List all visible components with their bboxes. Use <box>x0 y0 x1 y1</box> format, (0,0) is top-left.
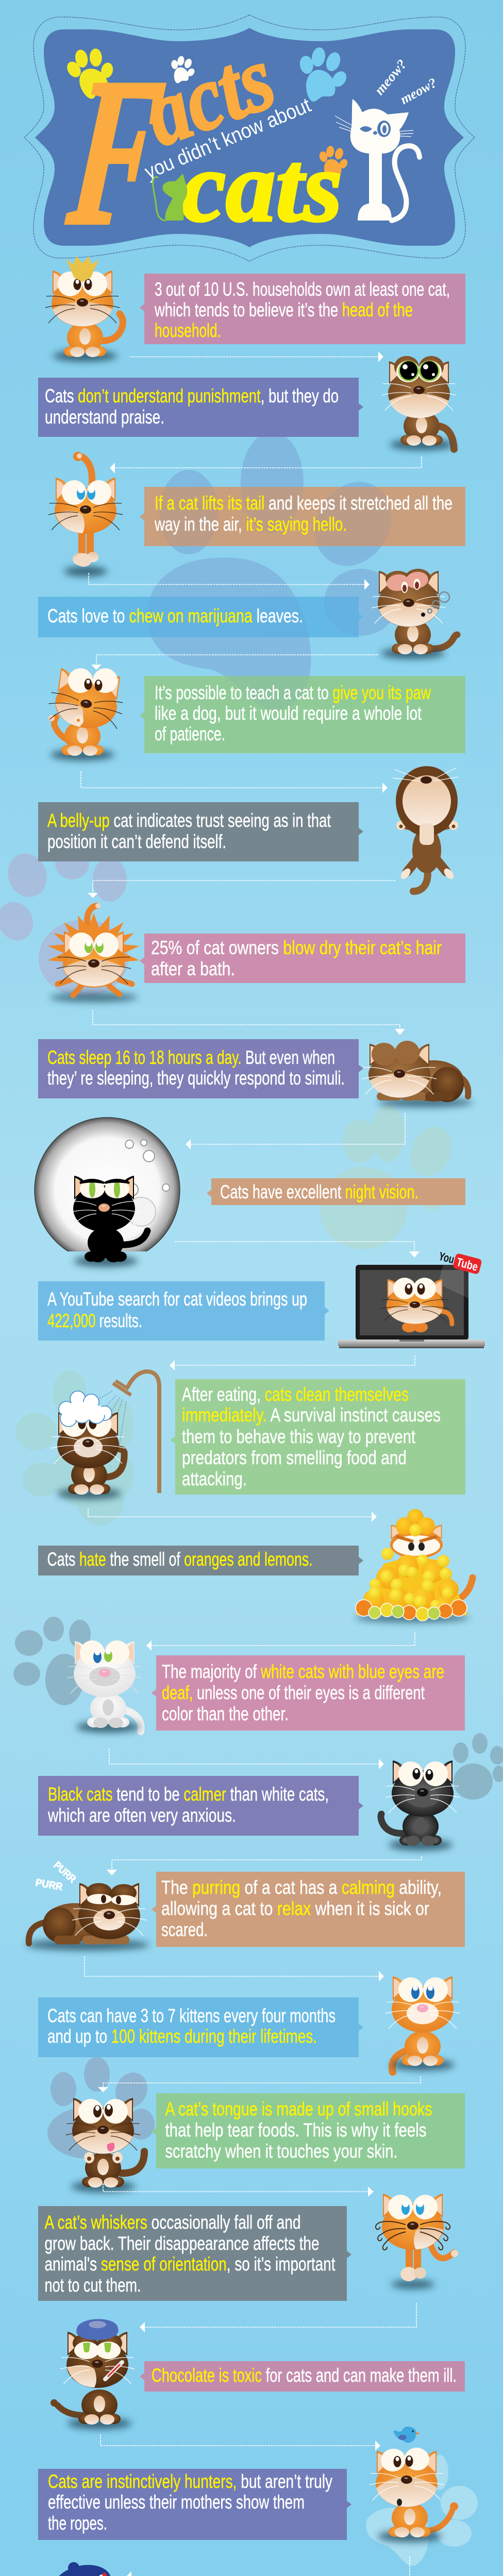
cat: orange tail up <box>48 452 123 577</box>
fact 3 panel <box>140 487 465 546</box>
cat: belly up <box>393 766 459 891</box>
icon: yellow paw <box>62 43 121 103</box>
fact 10 panel <box>38 1281 329 1341</box>
background paw: pale behind bird cat <box>366 2455 478 2566</box>
fact 2 panel: Cats don’t understand punishment, but they do <box>45 385 339 406</box>
background paw: large blue <box>147 432 406 710</box>
fact 17 panel: that help tear foods. This is why it feels <box>165 2120 427 2141</box>
fact 6 panel: position it can’t defend itself. <box>47 831 226 852</box>
fact 3 panel: way in the air, it’s saying hello. <box>154 514 347 535</box>
title word: cats: cats <box>181 131 342 243</box>
arrow 5 <box>81 771 388 793</box>
thermometer <box>105 2362 122 2379</box>
fact 15 panel: allowing a cat to relax when it is sick or <box>161 1898 429 1919</box>
youtube logo: Tube <box>455 1255 479 1274</box>
raised paws <box>84 2152 94 2163</box>
fact 11 panel: them to behave this way to prevent <box>182 1426 416 1447</box>
subtitle: you didn’t know about <box>141 94 314 183</box>
youtube logo <box>437 1249 482 1275</box>
fact 11 panel: immediately. A survival instinct causes <box>182 1404 441 1426</box>
purr label 2: PURR <box>35 1877 64 1893</box>
fact 10 panel: A YouTube search for cat videos brings up <box>47 1289 307 1310</box>
title banner <box>24 15 475 268</box>
crown <box>66 254 99 282</box>
fact 18 panel: grow back. Their disappearance affects the <box>44 2233 320 2254</box>
arrow 2 <box>110 456 422 473</box>
fact 2 panel: understand praise. <box>45 406 164 428</box>
fact 17 panel: scratchy when it touches your skin. <box>165 2141 398 2162</box>
background paw: green right <box>320 1105 460 1249</box>
fact 6 panel <box>38 802 363 861</box>
long whiskers <box>376 2222 450 2250</box>
arrow 15 <box>85 1956 384 1981</box>
fact 15 panel: The purring of a cat has a calming ability, <box>161 1877 442 1898</box>
cat: tongue out <box>66 2098 144 2192</box>
cat: brown green-eyed <box>382 356 456 450</box>
cat: with bird on head <box>370 2427 458 2542</box>
fact 18 panel <box>38 2206 351 2301</box>
fact 13 panel: color than the other. <box>162 1703 289 1724</box>
fact 8 panel: they’ re sleeping, they quickly respond to simuli. <box>47 1067 345 1089</box>
icon: white paw <box>166 54 198 87</box>
cat: in citrus pile <box>356 1509 473 1622</box>
arrow 17 <box>103 2183 374 2197</box>
fact 5 panel: of patience. <box>155 723 225 744</box>
youtube logo: You <box>438 1249 456 1266</box>
fact 11 panel: attacking. <box>182 1468 247 1489</box>
fact 13 panel: deaf, unless one of their eyes is a different <box>162 1682 425 1703</box>
beret <box>48 2559 115 2576</box>
cat: showering <box>51 1391 125 1499</box>
icon: orange paw <box>316 145 350 180</box>
fact 17 panel <box>152 2093 465 2168</box>
cat: purring <box>26 1883 149 1951</box>
icon: white cat <box>335 99 420 221</box>
arrow 18 <box>140 2303 416 2332</box>
cat: crowned orange <box>45 254 123 362</box>
cat: black with night vision <box>67 1176 147 1267</box>
background paw: grey left <box>13 1617 91 1705</box>
meow 2: meow? <box>397 75 439 107</box>
fact 19 panel <box>140 2361 465 2392</box>
paw tint over panel <box>159 487 391 546</box>
icon: green cat <box>153 174 187 221</box>
cat: spiky blow dried <box>48 903 140 1002</box>
foam <box>59 1391 112 1427</box>
meow 1: meow? <box>372 56 410 98</box>
arrow 14 <box>107 1856 422 1875</box>
arrow 7 <box>93 1010 405 1035</box>
cat: orange giving paw <box>46 667 127 760</box>
cat: white odd eyes <box>68 1640 142 1733</box>
fact 13 panel <box>152 1655 465 1731</box>
icon: blue paw <box>291 44 353 107</box>
fact 7 panel <box>140 934 465 983</box>
paw tint over panel <box>147 432 406 710</box>
banner stitching <box>24 15 475 261</box>
fact 16 panel: and up to 100 kittens during their lifetimes. <box>47 2026 317 2047</box>
fact 17 panel: A cat’s tongue is made up of small hooks <box>165 2098 432 2120</box>
fact 14 panel: which are often very anxious. <box>47 1805 236 1826</box>
arrow 8 <box>186 1113 405 1149</box>
cat: stoned brown <box>372 569 457 659</box>
arrow 11 <box>88 1509 377 1522</box>
purr label 1: PURR <box>52 1859 78 1885</box>
arrow 9 <box>175 1242 420 1258</box>
fact 11 panel: predators from smelling food and <box>182 1447 407 1468</box>
fact 12 panel <box>38 1546 363 1575</box>
arrow 19 <box>100 2434 380 2451</box>
background paw: lilac left <box>0 848 128 997</box>
fact 9 panel <box>207 1178 465 1205</box>
fact 1 panel: household. <box>155 320 221 341</box>
arrow 12 <box>146 1632 415 1651</box>
arrow 6 <box>88 880 395 898</box>
title word: F: F <box>59 36 172 268</box>
fact 4 panel: Cats love to chew on marijuana leaves. <box>47 605 303 626</box>
fact 1 panel: which tends to believe it’s the head of the <box>154 299 413 320</box>
ice bag <box>76 2319 119 2340</box>
cat: french with beret <box>48 2559 128 2576</box>
fact 11 panel: After eating, cats clean themselves <box>182 1384 409 1405</box>
arrow 3 <box>89 573 370 590</box>
fact 3 panel: If a cat lifts its tail and keeps it stretched all the <box>155 493 452 514</box>
fact 20 panel: effective unless their mothers show them <box>48 2492 305 2513</box>
fact 6 panel: A belly-up cat indicates trust seeing as in that <box>47 810 331 831</box>
fact 18 panel: animal's sense of orientation, so it’s important <box>44 2253 336 2275</box>
arrow 4 <box>91 655 378 670</box>
fact 12 panel: Cats hate the smell of oranges and lemons. <box>47 1549 312 1570</box>
fact 5 panel: like a dog, but it would require a whole lot <box>155 703 422 724</box>
fact 20 panel: the ropes. <box>48 2513 107 2534</box>
fact 16 panel <box>38 1997 363 2057</box>
shower <box>98 1371 159 1493</box>
cat: curly whiskers <box>376 2194 458 2289</box>
arrow 13 <box>109 1749 384 1769</box>
fact 1 panel <box>140 274 465 344</box>
raised paw <box>74 715 83 725</box>
background paw: green left <box>15 1370 134 1525</box>
banner shape <box>35 28 464 247</box>
fact 14 panel: Black cats tend to be calmer than white cats, <box>48 1784 329 1805</box>
paw tint over panel <box>147 432 406 710</box>
fact 2 panel <box>38 378 363 437</box>
fact 7 panel: after a bath. <box>151 958 235 979</box>
fact 8 panel <box>38 1039 363 1098</box>
fact 18 panel: A cat’s whiskers occasionally fall off and <box>44 2212 301 2233</box>
arrow 10 <box>170 1355 415 1370</box>
fact 9 panel: Cats have excellent night vision. <box>220 1181 418 1202</box>
laptop cat <box>381 1278 452 1332</box>
fact 13 panel: The majority of white cats with blue eyes are <box>162 1661 444 1682</box>
joint and smoke <box>428 592 449 613</box>
cat: orange with lashes <box>385 1976 460 2072</box>
background paw: grey behind tongue cat <box>47 2057 155 2159</box>
arrow 16 <box>98 2076 421 2092</box>
fact 15 panel <box>152 1872 465 1947</box>
title word: acts: acts <box>132 26 287 166</box>
cat: dark grey calm <box>381 1760 460 1851</box>
background paw: grey right <box>453 1733 503 1800</box>
cat: sick <box>51 2319 135 2429</box>
fact 10 panel: 422,000 results. <box>47 1310 142 1331</box>
fact 11 panel <box>171 1379 465 1495</box>
citrus slices <box>356 1600 467 1621</box>
cat: sleeping <box>362 1041 473 1107</box>
fact 8 panel: Cats sleep 16 to 18 hours a day. But even when <box>47 1047 335 1068</box>
fact 15 panel: scared. <box>161 1919 208 1940</box>
fact 20 panel: Cats are instinctively hunters, but aren’t truly <box>48 2471 332 2492</box>
moon <box>35 1117 180 1263</box>
arrow 1 <box>130 351 383 362</box>
fact 5 panel <box>140 676 465 753</box>
bird <box>393 2427 420 2443</box>
fact 14 panel <box>38 1776 363 1836</box>
fact 7 panel: 25% of cat owners blow dry their cat’s hair <box>151 937 442 958</box>
fact 20 panel <box>38 2469 351 2540</box>
arrow 20 <box>126 2556 410 2576</box>
fact 5 panel: It’s possible to teach a cat to give you its paw <box>155 682 431 703</box>
fact 18 panel: not to cut them. <box>44 2275 141 2296</box>
fact 4 panel <box>38 597 363 637</box>
laptop with cat <box>338 1249 485 1348</box>
fact 16 panel: Cats can have 3 to 7 kittens every four months <box>47 2005 336 2026</box>
